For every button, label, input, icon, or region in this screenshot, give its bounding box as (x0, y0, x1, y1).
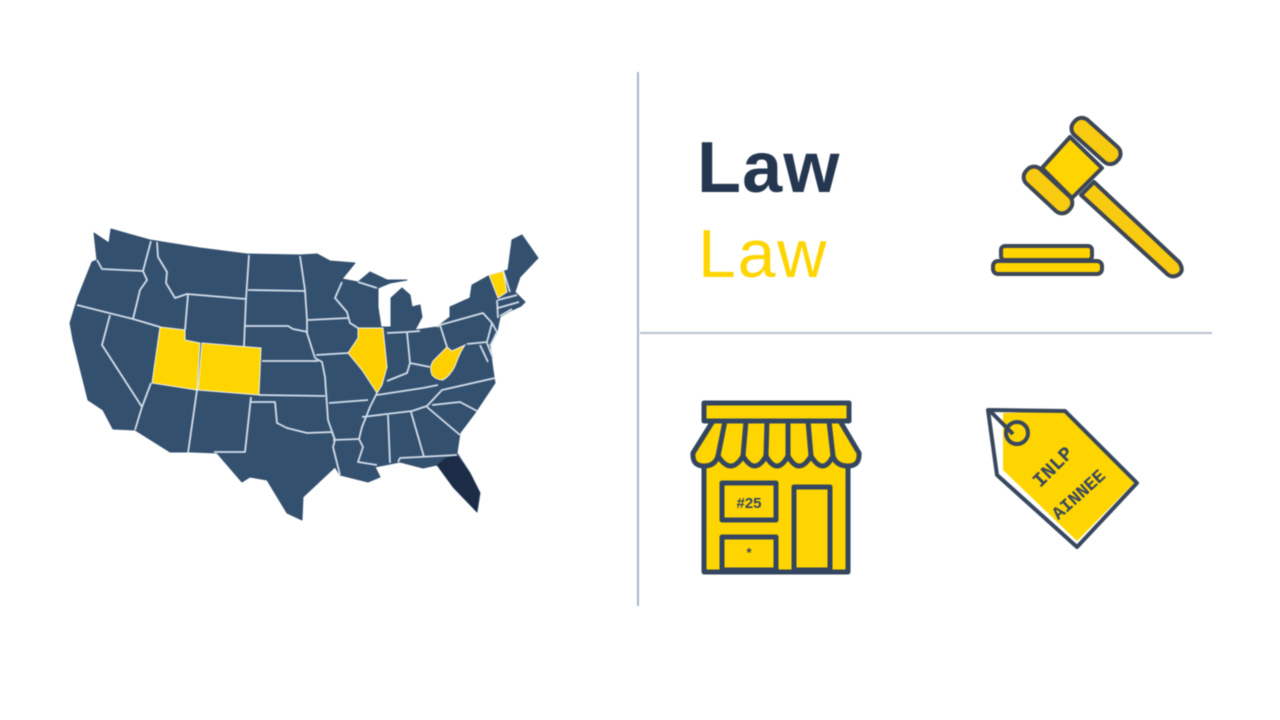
store window (722, 483, 776, 520)
store fascia (704, 403, 849, 421)
lower panel mark: * (746, 545, 752, 560)
icon: gavel (993, 114, 1182, 276)
awning stripes (718, 421, 833, 456)
store lower panel (722, 537, 776, 570)
gavel lower cap (1020, 163, 1076, 217)
heading: Law yellow: Law (698, 216, 828, 292)
highlighted state: New Hampshire (489, 271, 507, 298)
tag outline (988, 410, 1137, 547)
icon: price tag (988, 410, 1137, 547)
gavel upper cap (1068, 114, 1124, 168)
highlighted state: West Virginia (431, 345, 465, 380)
tag label line two: AINNEE (1049, 466, 1111, 525)
tag hole and string (990, 411, 1028, 444)
store building (704, 445, 848, 572)
store door (794, 487, 830, 570)
highlighted state: Utah (152, 327, 200, 390)
tag yellow fill (1003, 411, 1134, 541)
gavel handle (1081, 182, 1182, 276)
state borders (77, 241, 519, 475)
store awning (693, 421, 859, 466)
gavel base top (1001, 246, 1092, 260)
tag label line one: INLP (1029, 443, 1079, 493)
heading: Law dark: Law (697, 128, 841, 208)
horizontal divider (640, 332, 1212, 334)
highlighted state: Colorado (198, 343, 261, 395)
vertical divider (637, 72, 639, 606)
highlighted state: Illinois (348, 328, 387, 393)
gavel base bottom (993, 261, 1102, 274)
icon: storefront (693, 403, 859, 572)
gavel head (1042, 137, 1102, 198)
window sign text: #25 (736, 495, 762, 512)
map silhouette (70, 229, 538, 520)
Florida peninsula, darker (437, 455, 480, 512)
map of the United States (70, 229, 538, 520)
